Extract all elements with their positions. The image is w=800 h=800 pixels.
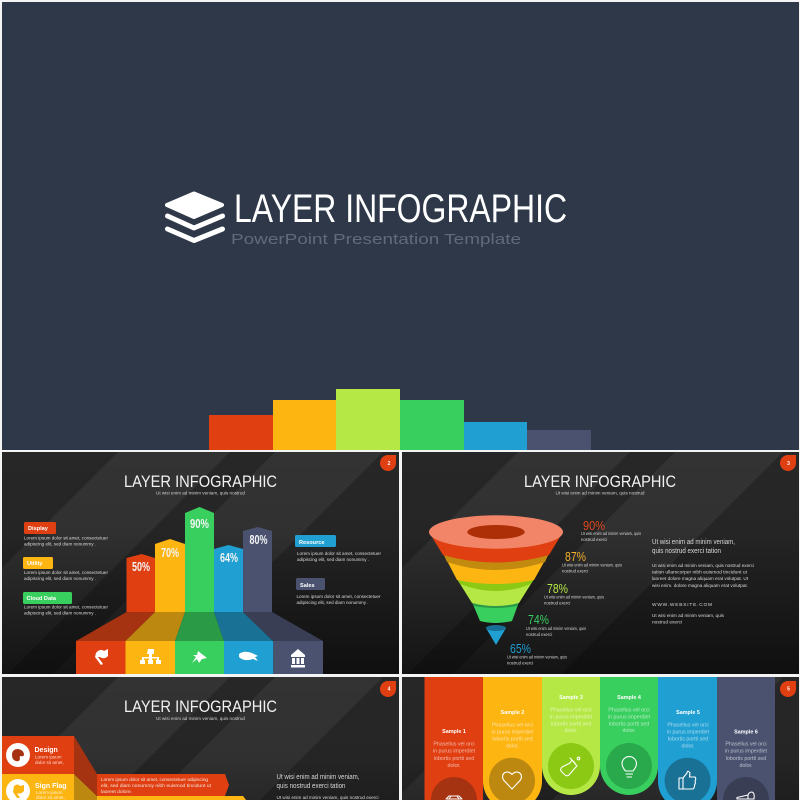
callout: resource: adipiscing elit, sed diam nonummy . — [297, 557, 369, 563]
block: sign flag — [2, 774, 74, 800]
callout: sales: adipiscing elit, sed diam nonummy . — [296, 600, 368, 606]
block: sign flag: dolor sit amet, — [36, 795, 65, 800]
callout: utility: Utility — [27, 561, 43, 567]
funnel chart — [429, 515, 563, 645]
column: sample 2: dolor. — [506, 744, 519, 750]
funnel tier: yellow — [443, 553, 549, 584]
block: sign flag: Sign Flag — [35, 783, 66, 790]
stat: 90%: 90% — [583, 519, 605, 533]
panel: slide 2 arrow bars — [2, 452, 399, 674]
column: sample 4: Phasellus vel orci — [608, 708, 650, 714]
text block: description — [652, 539, 754, 626]
column: sample 3 — [542, 677, 600, 795]
stat: 74%: Ut wisi enim ad minim veniam, quis — [526, 626, 586, 631]
callout: resource — [295, 535, 381, 563]
page badge — [380, 681, 396, 697]
column: sample 3: in purus imperdiet — [550, 714, 593, 720]
colour bar steps — [209, 389, 591, 450]
text block: description: Ut wisi enim ad minim veniam, — [652, 539, 735, 546]
text block: description: wisi enim. dolore magna aliquam erat volutpat. — [652, 583, 748, 589]
column: sample 6: lobortis portti sed — [726, 756, 766, 762]
page badge — [380, 455, 396, 471]
page badge: 5 — [787, 686, 790, 692]
text block: description: laoreet dolore magna aliquam erat volutpat. Ut — [652, 576, 749, 582]
stat: 78%: nostrud exerci — [544, 600, 570, 606]
arrow bar: red — [74, 736, 229, 796]
column: sample 2: Phasellus vel orci — [492, 722, 533, 728]
heading: LAYER INFOGRAPHIC — [124, 697, 277, 716]
column: sample 6: Phasellus vel orci — [725, 742, 767, 748]
bar: 90%: 90% — [190, 516, 209, 531]
stat: 65%: 65% — [510, 642, 531, 656]
text block: description: tation ullamcorper nibh euismod tincidunt ut — [652, 570, 748, 576]
page badge: 3 — [787, 461, 790, 467]
callout: utility: Lorem ipsum dolor sit amet, consectetuer — [24, 570, 108, 576]
callout: cloud data: Lorem ipsum dolor sit amet, consectetuer — [24, 604, 108, 610]
column: sample 1: Phasellus vel orci — [433, 742, 475, 748]
column: sample 5: dolor. — [682, 744, 694, 750]
bar: 64% — [214, 545, 243, 612]
panel: slide 4 layered arrows — [2, 677, 399, 800]
stat: 90%: Ut wisi enim ad minim veniam, quis — [581, 531, 641, 536]
column: sample 4: Sample 4 — [617, 695, 641, 701]
column: sample 4: dolor. — [623, 728, 635, 734]
column: sample 3: lobortis portti sed — [551, 722, 591, 728]
arrow bar: red: laoreet dolore. — [101, 789, 132, 795]
stat: 87%: 87% — [565, 550, 586, 564]
front block: flag icon — [76, 641, 126, 674]
funnel tier: green — [472, 602, 519, 623]
panel: slide 3 funnel — [402, 452, 799, 674]
page badge — [780, 455, 796, 471]
heading: LAYER INFOGRAPHIC — [524, 472, 676, 491]
column: sample 2: Sample 2 — [501, 710, 524, 716]
text block: description: quis nostrud exerci tation — [652, 548, 721, 555]
stat: 65%: nostrud exerci — [507, 660, 533, 666]
column: sample 3: dolor. — [565, 728, 577, 734]
callout: resource: Lorem ipsum dolor sit amet, consectetuer — [297, 551, 381, 557]
column: sample 1: in purus imperdiet — [433, 748, 476, 754]
bar: 70% — [155, 539, 185, 612]
slide background — [2, 677, 399, 800]
panel: slide 5 hanging columns — [402, 677, 799, 800]
front block: org chart icon — [126, 641, 175, 674]
callout: cloud data: Cloud Data — [26, 596, 57, 602]
callout: sales: Sales — [300, 583, 315, 589]
text block: description — [276, 774, 378, 800]
arrow bar: red: Lorem ipsum dolor sit amet, consectetuer adipiscing — [101, 777, 208, 783]
stat: 74% — [526, 613, 586, 637]
bar: 70%: 70% — [161, 545, 179, 560]
stat: 78% — [544, 582, 604, 606]
column: sample 4: lobortis portti sed — [609, 722, 649, 728]
text block: description: nostrud exerci — [652, 620, 682, 626]
subtitle: PowerPoint Presentation Template — [231, 231, 521, 248]
column: sample 5: in purus imperdiet — [667, 730, 710, 736]
block: design — [2, 736, 74, 774]
stat: 78%: 78% — [547, 582, 568, 596]
floor perspective — [76, 612, 323, 641]
main title: LAYER INFOGRAPHIC — [234, 187, 567, 231]
callout: resource: Resource — [299, 540, 324, 546]
stat: 87% — [562, 550, 622, 574]
callout: sales: Lorem ipsum dolor sit amet, consectetuer — [296, 594, 381, 600]
callout: display — [24, 522, 108, 548]
callout: cloud data — [23, 592, 108, 616]
bar: 50%: 50% — [132, 559, 150, 574]
text block: description: WWW.WEBSITE.COM — [652, 602, 712, 608]
column: sample 5: lobortis portti sed — [668, 736, 708, 742]
column: sample 5: Sample 5 — [676, 710, 700, 716]
slide background — [402, 452, 799, 674]
heading: LAYER INFOGRAPHIC — [124, 472, 277, 491]
text block: description: quis nostrud exerci tation — [276, 783, 346, 790]
front block: bank icon — [273, 641, 323, 674]
callout: display: Lorem ipsum dolor sit amet, consectetuer — [24, 536, 108, 542]
callout: utility: adipiscing elit, sed diam nonummy . — [24, 576, 96, 582]
column: sample 6: Sample 6 — [734, 730, 758, 736]
page badge: 4 — [388, 686, 391, 692]
column: sample 6: in purus imperdiet — [725, 748, 768, 754]
block: design: dolor sit amet, — [35, 760, 64, 765]
page badge — [780, 681, 796, 697]
callout: display: adipiscing elit, sed diam nonummy . — [24, 542, 96, 548]
stat: 65%: Ut wisi enim ad minim veniam, quis — [507, 654, 567, 660]
column: sample 2 — [483, 677, 542, 800]
callout: cloud data: adipiscing elit, sed diam nonummy . — [24, 610, 96, 616]
bar: 50% — [126, 554, 155, 612]
column: sample 1 — [424, 677, 483, 800]
column: sample 1: Sample 1 — [442, 729, 466, 735]
bar: 80%: 80% — [250, 532, 268, 547]
subheading: Ut wisi enim ad minim veniam, quis nostrud — [556, 490, 645, 496]
block: sign flag: Lorem ipsum — [36, 790, 63, 795]
subheading: Ut wisi enim ad minim veniam, quis nostrud — [156, 490, 245, 496]
panel: title slide — [2, 2, 799, 450]
column: sample 5: Phasellus vel orci — [667, 722, 709, 728]
callout: utility — [23, 557, 108, 582]
stat: 74%: 74% — [528, 613, 549, 627]
column: sample 1: dolor. — [448, 763, 460, 769]
text block: description: Ut wisi enim ad minim veniam, quis — [652, 613, 725, 619]
stat: 74%: nostrud exerci — [526, 632, 552, 637]
block: design: Lorem ipsum — [35, 754, 62, 760]
stat: 87%: Ut wisi enim ad minim veniam, quis — [562, 562, 622, 568]
page badge: 2 — [388, 461, 391, 467]
stat: 78%: Ut wisi enim ad minim veniam, quis — [544, 594, 604, 600]
column: sample 3: Sample 3 — [559, 695, 583, 701]
column: sample 2: lobortis portti sed — [492, 736, 533, 742]
bar: 80% — [243, 527, 272, 612]
front block: pin icon — [175, 641, 224, 674]
bar: 90% — [185, 507, 214, 612]
slide background — [402, 677, 799, 800]
arrow bar: yellow — [74, 774, 246, 800]
funnel tier: red top — [429, 515, 563, 562]
funnel tier: blue tip — [486, 625, 506, 645]
arrow bar: red: elit, sed diam nonummy nibh euismod tincidunt ut — [101, 783, 212, 789]
slide background — [2, 452, 399, 674]
column: sample 3: Phasellus vel orci — [550, 708, 592, 714]
stat: 90%: nostrud exerci — [581, 537, 607, 542]
column: sample 6 — [717, 677, 775, 800]
stat: 87%: nostrud exerci — [562, 568, 588, 574]
stat: 65% — [507, 642, 567, 666]
column: sample 2: in purus imperdiet — [491, 730, 534, 736]
column: sample 4: in purus imperdiet — [608, 714, 651, 720]
column: sample 5 — [658, 677, 717, 800]
callout: display: Display — [28, 526, 49, 532]
bar: 64%: 64% — [220, 550, 238, 565]
callout: sales — [296, 578, 381, 606]
icon: layer stack — [167, 194, 222, 240]
funnel tier: lime — [457, 579, 534, 606]
block: design: Design — [34, 747, 58, 754]
column: sample 4 — [600, 677, 658, 795]
column: sample 1: lobortis portti sed — [434, 756, 474, 762]
stat: 90% — [581, 519, 641, 542]
text block: description: Ut wisi enim ad minim veniam, quis nostrud exerci — [652, 563, 754, 569]
subheading: Ut wisi enim ad minim veniam, quis nostrud — [156, 716, 245, 722]
front block: plane icon — [224, 641, 273, 674]
column: sample 6: dolor. — [740, 763, 752, 769]
text block: description: Ut wisi enim ad minim veniam, — [276, 774, 360, 781]
